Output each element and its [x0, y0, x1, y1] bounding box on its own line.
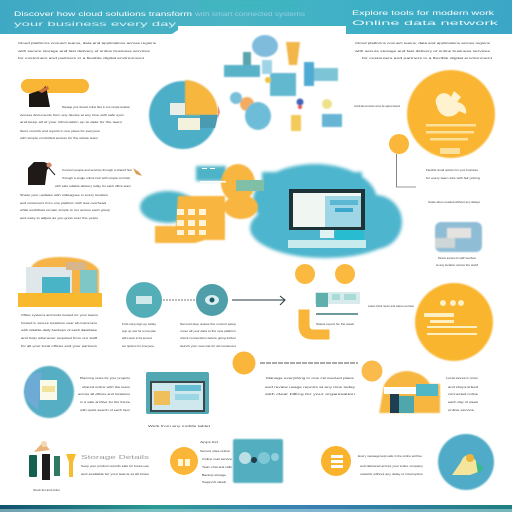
- text block: teal circle: [78, 376, 131, 412]
- teal step circle 2: [196, 284, 228, 316]
- connector text: Linked data connection across the regional network: [354, 104, 400, 108]
- icon: devices image: [435, 222, 482, 252]
- title left: with smart connected systems: [194, 12, 305, 18]
- big yellow circle: top: [407, 70, 495, 158]
- large teal cloud: [250, 164, 402, 258]
- teal circle with bird: [438, 434, 494, 490]
- text block: bottles: Keep your product records safe for future use: [81, 464, 150, 468]
- step text 1: First step sign up today: [122, 322, 157, 326]
- small screen panel: [315, 292, 360, 315]
- intro text left: [18, 41, 157, 60]
- text block: second item: through a single online hub with simple controls: [62, 176, 131, 180]
- caption: devices: Device access for staff members: [438, 256, 477, 260]
- text block: checklist: Apps list: [200, 440, 218, 444]
- text block: teal circle: across all offices and locations: [78, 392, 131, 396]
- caption: devices: [436, 256, 479, 267]
- intro text right: with secure storage and fast delivery of online business services: [355, 49, 491, 53]
- text block: storefront: connected online: [448, 392, 479, 396]
- big yellow circle: lower: [415, 283, 493, 361]
- text block: checklist: Secure sites online: [200, 449, 231, 453]
- middle text block: Manage everything in one connected place: [266, 376, 355, 380]
- text block: first item: with simple controlled access for the whole team: [20, 136, 99, 140]
- intro text right: Cloud platforms connect teams, data and applications across regions: [355, 41, 491, 45]
- step text 1: set options for everyone: [122, 344, 155, 348]
- text block: bottom right: Every message kept safe in the online archive: [358, 454, 423, 458]
- icon: yellow banner with figure: [21, 79, 89, 107]
- teal circle with note: [24, 366, 74, 418]
- tablet: [146, 372, 209, 414]
- yellow U connector: [300, 311, 328, 338]
- text block: teal circle: with quick search of each item: [80, 408, 131, 412]
- text block: third item: hosted in secure locations near all customers: [21, 321, 98, 325]
- caption: tablet: Work from any mobile tablet: [148, 424, 210, 428]
- step text 1: [122, 322, 157, 348]
- network diagram: [224, 35, 342, 131]
- icon: house scene: [18, 257, 102, 307]
- title right: Online data network: [352, 20, 500, 27]
- step text 1: sign up now for a new plan: [122, 329, 157, 333]
- text block: third item: and help whenever required from our staff: [21, 336, 97, 340]
- text block: teal circle: in a safe archive for the future: [80, 400, 131, 404]
- text block: bottles: Storage Details: [81, 455, 150, 461]
- icon: storefront scene: [379, 371, 440, 414]
- title left: your business every day: [14, 21, 178, 28]
- intro text right: [355, 41, 492, 60]
- header band: [0, 0, 512, 34]
- icon: bottles: [29, 441, 76, 480]
- yellow dots under cloud: [295, 264, 355, 284]
- text block: checklist: Online mail service: [202, 457, 233, 461]
- yellow icon circle: bottom right: [321, 446, 351, 476]
- text block: second item: [20, 168, 133, 220]
- text block: second item: Share your updates with colleagues in every location: [20, 193, 109, 197]
- yellow grid tiles: [177, 209, 206, 235]
- step text 2: check connections before going further: [180, 336, 236, 340]
- text block: first item: Access documents from any device at any time with safe sync: [20, 113, 125, 117]
- step text 2: move all your data to the new platform: [180, 329, 237, 333]
- text block: teal circle: Planning notes for your projects: [80, 376, 131, 380]
- text block: storefront: [446, 376, 479, 412]
- left teal cloud: [140, 166, 226, 223]
- text block: third item: [21, 313, 99, 348]
- text block: first item: and keep all of your information up to date for the team: [20, 120, 123, 124]
- caption: devices: at any location across the world: [436, 263, 479, 267]
- text block: first item: Store records and reports in one place for everyone: [20, 129, 101, 133]
- step text 1: add a team to the account: [122, 336, 152, 340]
- intro text left: with secure storage and fast delivery of online business services: [18, 49, 151, 53]
- arrow: [232, 296, 285, 305]
- panel note: Latest cloud report and status overview: [368, 304, 414, 308]
- step text 2: launch your new site for all customers: [180, 344, 237, 348]
- text block: storefront: and shops linked: [448, 385, 479, 389]
- teal network tile: [233, 439, 283, 483]
- text block: right second: Flexible cloud options for your business: [426, 168, 479, 172]
- middle text block: [265, 376, 356, 396]
- title left: [14, 12, 305, 28]
- middle text block: and review usage reports at any time today: [265, 385, 356, 389]
- icon: small pointer: [133, 168, 142, 176]
- text block: storefront: Local stores in town: [446, 376, 479, 380]
- step text 2: [180, 322, 237, 348]
- teal step circle 1: [126, 282, 162, 318]
- text block: third item: with reliable daily backups of each database: [21, 328, 98, 332]
- monitor: [288, 189, 366, 248]
- text block: third item: Office systems and tools hosted for your teams: [21, 313, 99, 317]
- pie chart circle: [149, 80, 220, 149]
- caption: bottles: Stock list and order: [33, 488, 60, 492]
- intro text left: for customers and partners in a flexible digital environment: [18, 56, 144, 60]
- text block: right second: [426, 168, 481, 204]
- connector line: [260, 362, 358, 364]
- yellow blobs: [155, 164, 258, 243]
- text block: second item: while workflows remain simple to run across each group: [20, 208, 111, 212]
- text block: checklist: Backup storage: [202, 473, 227, 477]
- footer band: [0, 505, 512, 512]
- text block: checklist: [200, 440, 233, 484]
- text block: checklist: Support desk: [202, 480, 227, 484]
- text block: bottles: and available for your teams at all times: [81, 472, 150, 476]
- middle text block: with clear billing for your organisation: [265, 392, 356, 396]
- text block: right second: Scale when needed without any delays: [428, 200, 481, 204]
- top teal tiles: [200, 168, 226, 182]
- connector between steps: [163, 299, 196, 301]
- teal overlay tile: [236, 180, 264, 191]
- title right: Explore tools for modern work: [352, 11, 496, 17]
- yellow dot: right: [362, 360, 382, 382]
- title left: Discover how cloud solutions transform: [14, 12, 192, 18]
- intro text right: for customers and partners in a flexible digital environment: [362, 56, 492, 60]
- intro text left: Cloud platforms connect teams, data and applications across regions: [18, 41, 157, 45]
- text block: first item: Manage your shared online files in one simple location: [62, 105, 131, 109]
- step text 2: Second step review the current setup: [180, 322, 237, 326]
- text block: storefront: online service: [448, 408, 475, 412]
- text block: first item: [20, 105, 131, 140]
- text block: third item: for all your local offices and your partners: [21, 344, 98, 348]
- panel note: [316, 304, 414, 326]
- text block: bottom right: [358, 454, 424, 476]
- yellow dot: middle: [232, 352, 256, 374]
- yellow icon circle: bottom left: [170, 447, 198, 475]
- text block: second item: and easy to adjust as you grow over the years: [20, 216, 99, 220]
- text block: teal circle: shared online with the team: [82, 385, 131, 389]
- text block: bottom right: network without any delay or interruption: [360, 472, 424, 476]
- text block: checklist: Team chat and calls: [202, 465, 233, 469]
- text block: bottles: [81, 455, 150, 476]
- title right: [352, 11, 500, 27]
- cloud illustration: [140, 164, 402, 258]
- text block: right second: for every team size with fair pricing: [426, 176, 481, 180]
- text block: second item: and customers from one platform with less overhead: [20, 201, 107, 205]
- text block: second item: Connect people and services through a shared hub: [62, 168, 133, 172]
- text block: storefront: each day of week: [448, 400, 479, 404]
- icon: person with megaphone: [28, 162, 55, 185]
- text block: second item: with safe reliable delivery today for each office team: [55, 184, 132, 188]
- text block: bottom right: and delivered across your entire company: [360, 464, 424, 468]
- panel note: Status report for the week: [316, 322, 355, 326]
- small yellow dot with connector: [389, 134, 416, 187]
